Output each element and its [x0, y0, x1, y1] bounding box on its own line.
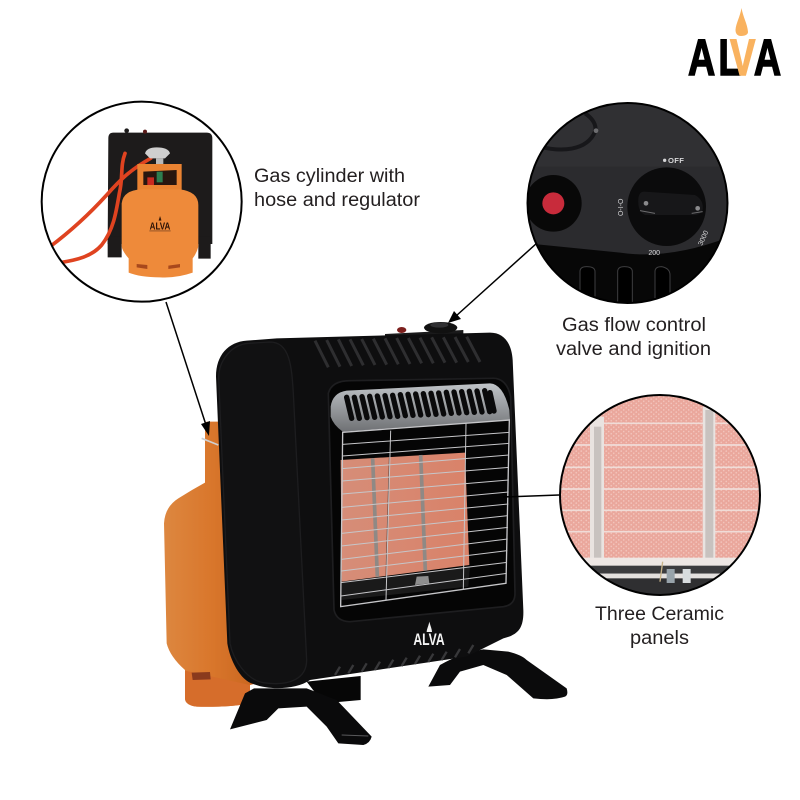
- ceramic mesh: [558, 393, 762, 562]
- dial markings: O-I-O: [618, 198, 625, 216]
- side panel highlight: [219, 342, 307, 684]
- window recess: [328, 378, 515, 622]
- orange cylinder: [122, 164, 198, 277]
- callout: control valve inset: [525, 102, 730, 307]
- emblem: ALVA on heater: ALVA: [413, 630, 445, 649]
- ignition button: [525, 175, 582, 232]
- vertical bars: [590, 407, 715, 560]
- lower vent section: [538, 240, 719, 302]
- arrow: cylinder callout to cylinder: [166, 302, 210, 436]
- callout: ceramic panels inset: [558, 393, 762, 598]
- control knob and ignition on top: [385, 322, 463, 337]
- cylinder label: ALVA: [150, 221, 170, 232]
- logo wordmark: ALVA: [688, 28, 781, 86]
- text: ceramic panels label: [595, 604, 724, 649]
- leader line: ceramic callout to panels: [503, 495, 559, 497]
- text: gas cylinder label: hose and regulator: [254, 190, 421, 211]
- regulator: [145, 147, 170, 164]
- upper panel: [527, 102, 730, 167]
- horizontal wires: [558, 423, 762, 532]
- base block: [307, 676, 361, 703]
- logo: ALVA: [688, 8, 781, 86]
- red hoses: [50, 153, 151, 263]
- text: control valve label: Gas flow control: [562, 315, 706, 336]
- heater body: [216, 333, 523, 688]
- text: ceramic panels label: panels: [630, 628, 689, 649]
- arrow: control valve callout to knob: [448, 243, 537, 323]
- heater rear view: [108, 128, 212, 259]
- text: control valve label: valve and ignition: [556, 339, 711, 360]
- burner base: [583, 558, 737, 594]
- wire guard: [341, 420, 509, 607]
- text: ceramic panels label: Three Ceramic: [595, 604, 724, 625]
- dial markings: 3000: [697, 230, 710, 247]
- front foot: [230, 688, 372, 745]
- control dial: [627, 167, 706, 246]
- top vents: [315, 337, 480, 367]
- rear foot: [428, 649, 567, 699]
- panel: ceramic plates: [340, 453, 470, 600]
- text: control valve label: [556, 315, 711, 360]
- emblem: ALVA on heater: [413, 622, 445, 649]
- dial markings: [618, 156, 710, 257]
- dial markings: 200: [648, 250, 660, 257]
- text: gas cylinder label: [254, 166, 421, 211]
- icon: logo flame: [736, 8, 748, 36]
- chrome vent: [331, 383, 510, 432]
- bottom vents: [335, 645, 473, 675]
- product photo: heater with gas cylinder: [164, 322, 567, 745]
- callout: gas cylinder inset: [40, 100, 243, 303]
- text: gas cylinder label: Gas cylinder with: [254, 166, 405, 187]
- dial markings: OFF: [668, 156, 684, 165]
- gas cylinder behind heater: [164, 422, 257, 707]
